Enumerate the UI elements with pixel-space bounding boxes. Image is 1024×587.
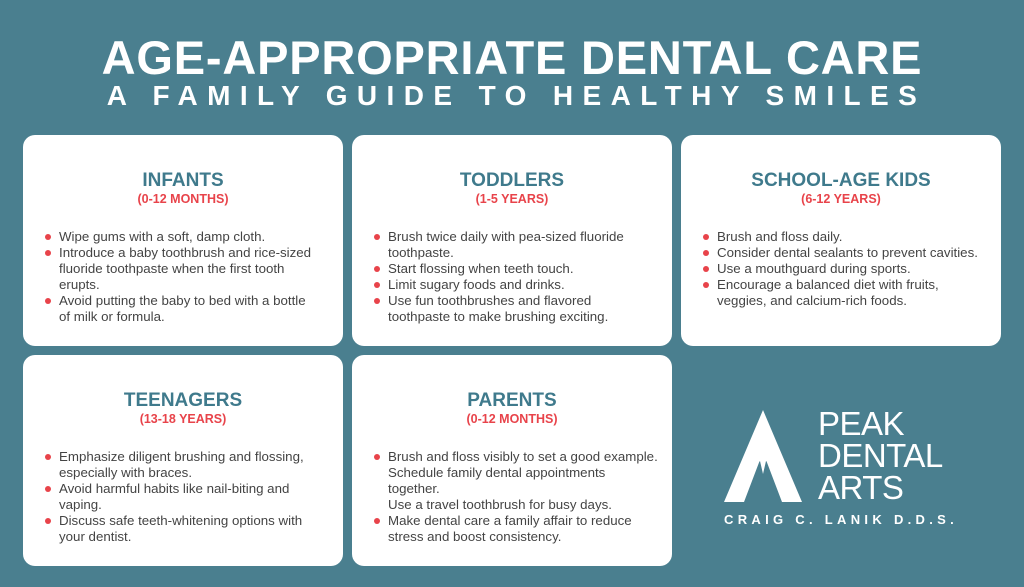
panel: toddlers: toothpaste to make brushing exciting.	[388, 309, 608, 324]
title: AGE-APPROPRIATE DENTAL CARE	[102, 31, 922, 84]
panel: infants: fluoride toothpaste when the first tooth	[59, 261, 284, 276]
panel: infants: INFANTS	[142, 170, 224, 191]
panel: parents: Use a travel toothbrush for busy days.	[388, 497, 612, 512]
logo text: DENTAL	[818, 437, 943, 474]
panel: teenagers: Discuss safe teeth-whitening options with	[59, 513, 302, 528]
panel: infants: Avoid putting the baby to bed with a bottle	[59, 293, 306, 308]
panel: parents: Schedule family dental appointments	[388, 465, 605, 480]
logo	[724, 405, 958, 527]
panel: infants: (0-12 MONTHS)	[138, 192, 228, 206]
panel: teenagers: TEENAGERS	[124, 390, 242, 411]
panel: school-age kids: veggies, and calcium-rich foods.	[717, 293, 907, 308]
logo text: ARTS	[818, 469, 903, 506]
subtitle: A FAMILY GUIDE TO HEALTHY SMILES	[107, 80, 926, 111]
panel: toddlers: (1-5 YEARS)	[476, 192, 548, 206]
logo tagline: CRAIG C. LANIK D.D.S.	[724, 512, 958, 527]
panel: school-age kids: SCHOOL-AGE KIDS	[751, 170, 931, 191]
panel: school-age kids	[681, 135, 1001, 346]
panel: teenagers: vaping.	[59, 497, 102, 512]
panel: school-age kids: Use a mouthguard during sports.	[717, 261, 911, 276]
panel: parents	[352, 355, 672, 566]
panel: parents: stress and boost consistency.	[388, 529, 561, 544]
panel: infants	[23, 135, 343, 346]
panel: parents: (0-12 MONTHS)	[466, 412, 557, 426]
panel: toddlers: TODDLERS	[460, 170, 564, 191]
panel: toddlers	[352, 135, 672, 346]
panel: parents: PARENTS	[467, 390, 557, 411]
panel: teenagers: (13-18 YEARS)	[140, 412, 226, 426]
panel: parents: Make dental care a family affair to reduce	[388, 513, 632, 528]
panel: teenagers: especially with braces.	[59, 465, 192, 480]
panel: teenagers: Avoid harmful habits like nail-biting and	[59, 481, 289, 496]
panel: school-age kids: Consider dental sealants to prevent cavities.	[717, 245, 978, 260]
panel: toddlers: Start flossing when teeth touch.	[388, 261, 574, 276]
panel: teenagers: Emphasize diligent brushing and flossing,	[59, 449, 304, 464]
panel: toddlers: Limit sugary foods and drinks.	[388, 277, 565, 292]
panel: school-age kids: (6-12 YEARS)	[801, 192, 881, 206]
panel: school-age kids: Encourage a balanced diet with fruits,	[717, 277, 939, 292]
panel: parents: together.	[388, 481, 440, 496]
panel: school-age kids: Brush and floss daily.	[717, 229, 842, 244]
panel: toddlers: Brush twice daily with pea-sized fluoride	[388, 229, 624, 244]
panel: infants: of milk or formula.	[59, 309, 165, 324]
panel: toddlers: toothpaste.	[388, 245, 454, 260]
icon: mountain peak	[724, 410, 802, 502]
panel: teenagers: your dentist.	[59, 529, 131, 544]
panel: infants: erupts.	[59, 277, 100, 292]
panel: teenagers	[23, 355, 343, 566]
panel: infants: Introduce a baby toothbrush and rice-sized	[59, 245, 311, 260]
panel: infants: Wipe gums with a soft, damp cloth.	[59, 229, 265, 244]
panel: parents: Brush and floss visibly to set a good example.	[388, 449, 658, 464]
logo text: PEAK	[818, 405, 904, 442]
logo text	[818, 405, 943, 506]
panel: toddlers: Use fun toothbrushes and flavored	[388, 293, 591, 308]
